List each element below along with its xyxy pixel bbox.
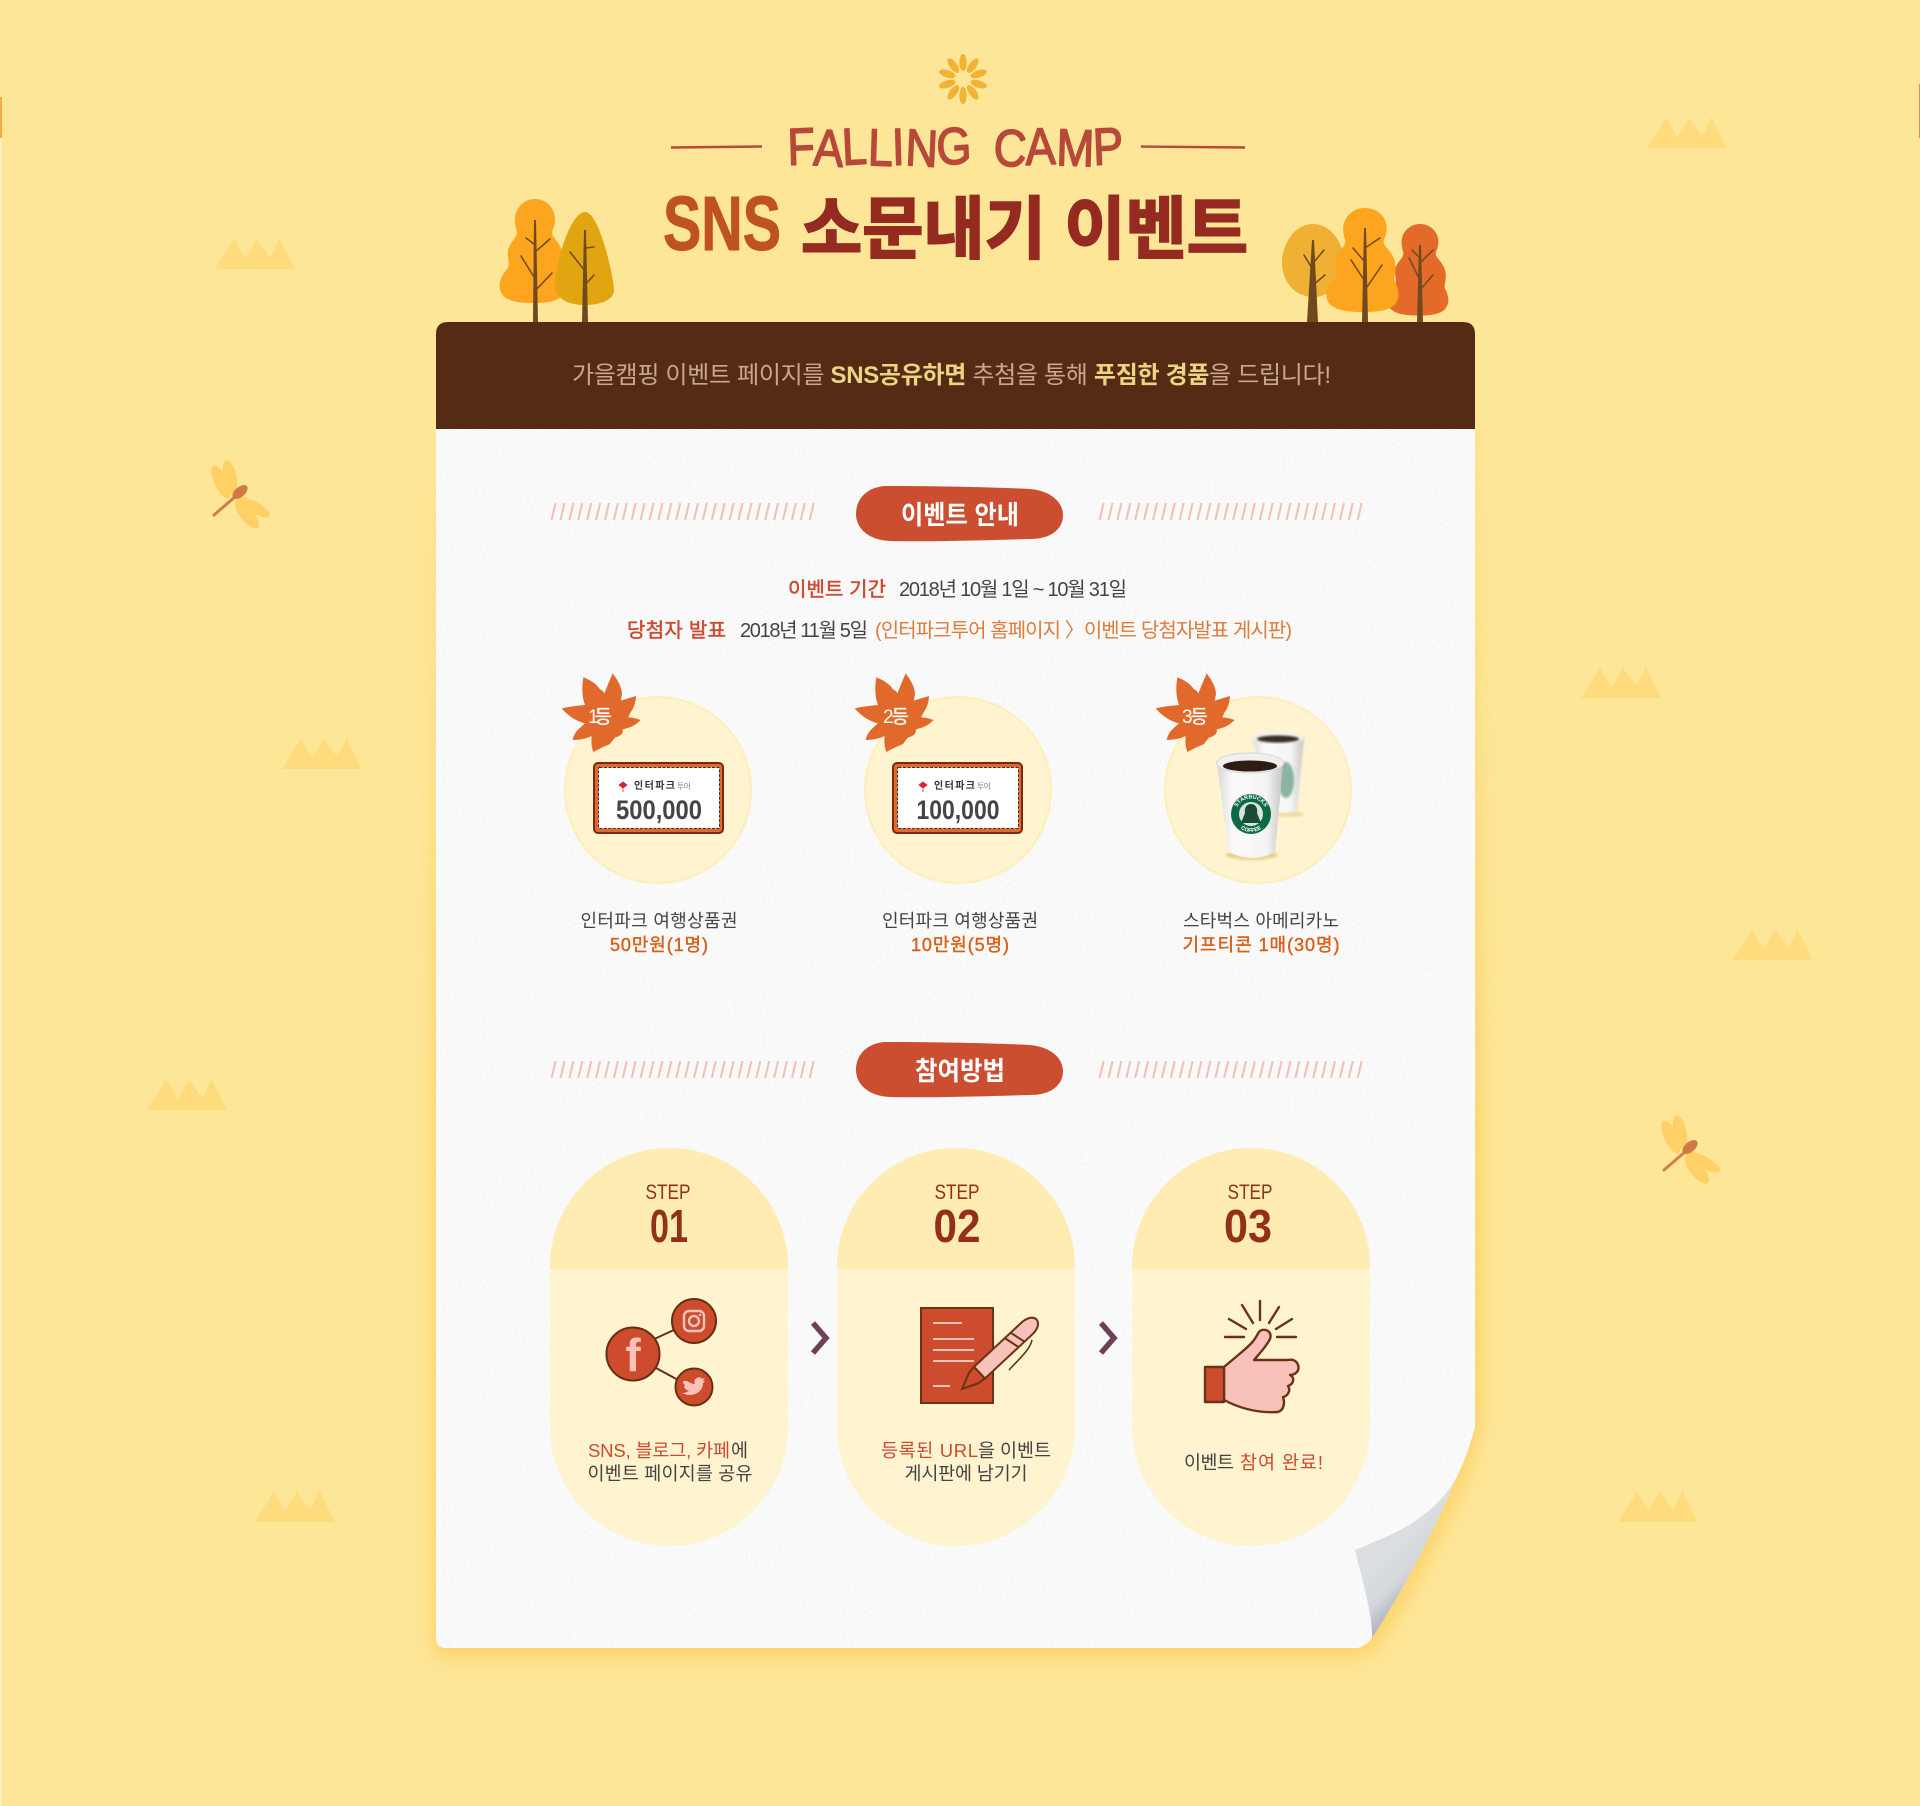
- prize 3: 3등: [1182, 707, 1208, 728]
- prize 2: 10만원(5명): [911, 935, 1009, 955]
- voucher 100,000: 100,000: [916, 795, 1000, 825]
- prize 1: 1등: [588, 707, 612, 728]
- prize 3: [1156, 674, 1352, 956]
- voucher 500,000: 500,000: [616, 795, 702, 825]
- step 2 card: [837, 1148, 1075, 1546]
- icon: coffee cups: STARBUCKS: [1234, 794, 1268, 806]
- event period line: 2018년 10월 1일 ~ 10월 31일: [899, 578, 1127, 601]
- arrow 2: [1101, 1323, 1114, 1353]
- panel: brown intro banner: [436, 322, 1475, 429]
- prize 2: 2등: [883, 707, 909, 728]
- step 3 card: STEP: [1228, 1181, 1272, 1204]
- icon: social share: [606, 1299, 716, 1406]
- trees right: [1282, 208, 1448, 322]
- step 3 text: 참여 완료!: [1240, 1452, 1323, 1473]
- voucher 500,000: [594, 763, 723, 833]
- icon: document and pen: [921, 1308, 1042, 1403]
- heading: SNS 소문내기 이벤트: SNS: [663, 181, 781, 267]
- winner announcement line: [627, 619, 1292, 642]
- section heading: event info: 이벤트 안내: [901, 500, 1019, 530]
- step 2 card: STEP: [934, 1181, 980, 1204]
- icon: dragonfly left: [208, 459, 273, 532]
- icon: dragonfly right: [1658, 1114, 1723, 1187]
- heading: Falling Camp: CAMP: [992, 117, 1125, 179]
- heading: SNS 소문내기 이벤트: [663, 181, 1248, 268]
- prize 1: 50만원(1명): [610, 935, 708, 955]
- section heading: how to join: 참여방법: [915, 1056, 1005, 1086]
- prize 3: 스타벅스 아메리카노: [1183, 911, 1339, 931]
- step 1 text: SNS, 블로그, 카페: [588, 1440, 730, 1461]
- voucher 500,000: 인터파크: [634, 780, 675, 792]
- step 2 text: [881, 1440, 1051, 1484]
- voucher 100,000: 투어: [977, 781, 991, 791]
- winner announcement line: 2018년 11월 5일: [740, 619, 868, 642]
- winner announcement line: (인터파크투어 홈페이지 〉이벤트 당첨자발표 게시판): [875, 619, 1292, 642]
- step 1 text: [588, 1440, 752, 1484]
- winner announcement line: 당첨자 발표: [627, 619, 726, 642]
- step 2 text: 게시판에 남기기: [904, 1463, 1028, 1484]
- step 1 card: [550, 1148, 788, 1546]
- page curl: [1355, 1470, 1460, 1638]
- heading: SNS 소문내기 이벤트: 소문내기 이벤트: [801, 192, 1248, 268]
- voucher 500,000: 투어: [677, 781, 691, 791]
- voucher 100,000: 인터파크: [934, 780, 975, 792]
- step 3 text: [1184, 1452, 1323, 1473]
- prize 3: 기프티콘 1매(30명): [1182, 935, 1340, 955]
- icon: social share: f: [625, 1329, 641, 1381]
- step 2 text: 등록된 URL: [881, 1440, 978, 1461]
- step 1 text: 에: [731, 1440, 748, 1461]
- intro text: 가을캠핑 이벤트 페이지를 SNS공유하면 추첨을 통해 푸짐한 경품을 드립니다!: [572, 362, 1331, 389]
- icon: coffee cups: [1216, 732, 1305, 861]
- prize 1: 인터파크 여행상품권: [580, 911, 738, 931]
- step 2 card: 02: [934, 1200, 980, 1252]
- prize 2: [855, 673, 1051, 955]
- section heading: how to join: [550, 1042, 1365, 1097]
- icon: flower: [938, 54, 988, 104]
- voucher 100,000: [893, 763, 1022, 833]
- heading: Falling Camp: FALLING: [786, 117, 973, 179]
- prize 2: 인터파크 여행상품권: [882, 911, 1038, 931]
- event period line: 이벤트 기간: [788, 578, 886, 601]
- step 1 text: 이벤트 페이지를 공유: [588, 1463, 752, 1484]
- panel: paper: [436, 322, 1476, 1650]
- heading: Falling Camp: [671, 117, 1245, 179]
- icon: coffee cups: COFFEE: [1241, 826, 1262, 832]
- prize 1: [562, 673, 751, 955]
- step 3 card: [1132, 1148, 1370, 1546]
- section heading: event info: [550, 486, 1365, 541]
- step 1 card: 01: [650, 1200, 688, 1252]
- step 2 text: 을 이벤트: [978, 1440, 1051, 1461]
- step 1 card: STEP: [646, 1181, 690, 1204]
- panel: paper shadow: [432, 430, 1482, 1658]
- arrow 1: [813, 1323, 826, 1353]
- background mountains: [147, 117, 1813, 1522]
- step 3 card: 03: [1224, 1200, 1272, 1252]
- event period line: [788, 578, 1127, 601]
- trees left: [500, 199, 614, 322]
- icon: thumbs up: [1205, 1301, 1299, 1412]
- step 3 text: 이벤트: [1184, 1452, 1234, 1473]
